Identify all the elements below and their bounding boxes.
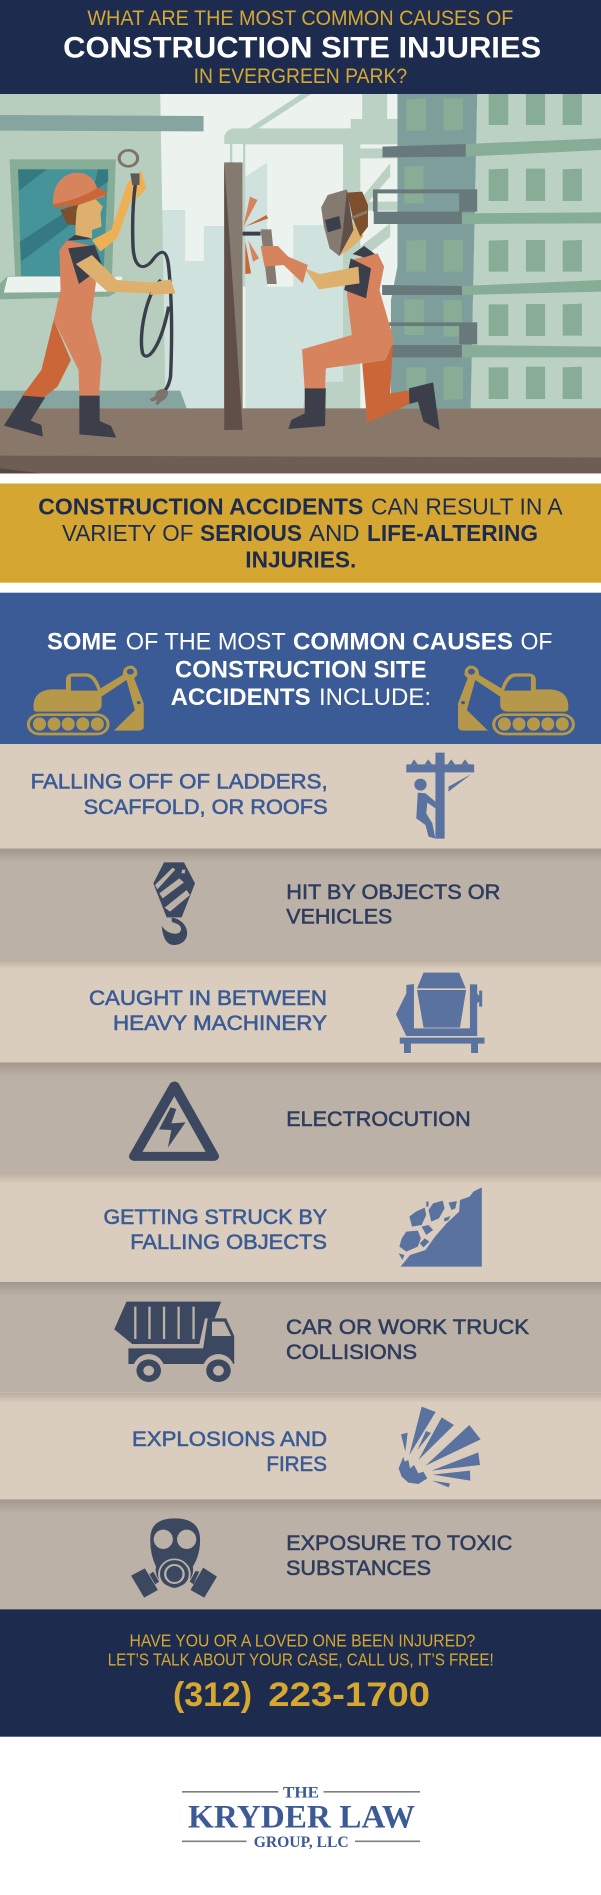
statement line 3: INJURIES. [245,547,356,573]
background skyline [161,94,399,408]
row 8: toxic substances [0,1499,601,1609]
worker left with cable [4,150,176,438]
statement line 1: CONSTRUCTION ACCIDENTS [38,494,363,520]
call to action text: HAVE YOU OR A LOVED ONE BEEN INJURED? [130,1630,476,1650]
phone number [173,1676,430,1714]
call to action text [108,1630,494,1669]
icon: crane hook [153,862,195,945]
building: left with window [0,94,204,408]
row 2 text [286,880,500,929]
panel: blue causes heading [0,593,601,744]
row 7: explosions [0,1393,601,1499]
icon: high voltage triangle [134,1086,214,1156]
row 4: electrocution [0,1062,601,1172]
icon: explosion [399,1407,481,1487]
row 6 text [286,1315,530,1364]
panel: call to action [0,1609,601,1737]
post [224,162,243,430]
panel: gold statement [0,484,601,583]
worker right welding [243,189,440,430]
title line 3: IN EVERGREEN PARK? [194,65,407,88]
icon: dump truck [114,1302,235,1387]
row 5 text: GETTING STRUCK BY [104,1205,327,1229]
row 8 text [286,1531,512,1580]
title line 2: CONSTRUCTION SITE INJURIES [63,31,541,64]
icon: cement mixer [396,973,484,1053]
icon: excavator left [28,666,144,734]
illustration: two construction workers [0,94,601,473]
row 7 text: FIRES [266,1452,327,1476]
logo: The Kryder Law Group: THE [283,1782,319,1801]
header: title band [0,0,601,94]
phone number: 223-1700 [268,1676,430,1714]
heading line 2: CONSTRUCTION SITE [175,656,426,683]
statement line 2: SERIOUS [200,520,302,546]
statement line 1 [38,494,563,520]
row 8 text: SUBSTANCES [286,1556,431,1580]
row 5 text [104,1205,327,1254]
heading line 1: COMMON CAUSES [293,629,513,656]
title line 1: WHAT ARE THE MOST COMMON CAUSES OF [87,7,513,30]
logo: The Kryder Law Group: GROUP, LLC [254,1834,349,1851]
row 3 text [89,986,327,1035]
call to action text: LET’S TALK ABOUT YOUR CASE, CALL US, IT’S FREE! [108,1649,494,1669]
row 1: falling [0,744,601,848]
row 1 text [31,769,328,819]
building: right tower [373,94,601,408]
statement line 2: AND [309,520,360,546]
logo: The Kryder Law Group [182,1782,420,1851]
ground [0,408,601,473]
heading line 1 [47,629,552,656]
heading line 3: INCLUDE: [319,684,431,711]
row 6: truck collisions [0,1282,601,1393]
row 2: hit by objects [0,848,601,960]
icon: worker climbing pole [406,753,474,839]
statement line 2: VARIETY OF [62,520,194,546]
statement line 2: LIFE-ALTERING [367,520,538,546]
heading line 1: OF THE MOST [126,629,286,656]
heading line 1: SOME [47,629,117,656]
heading line 1: OF [520,629,552,656]
heading line 3 [171,684,431,711]
row 2 text: HIT BY OBJECTS OR [286,880,500,904]
heading line 3: ACCIDENTS [171,684,311,711]
row 5: struck by falling objects [0,1172,601,1282]
icon: rockslide [399,1187,482,1267]
row 7 text [132,1427,327,1476]
logo: The Kryder Law Group: KRYDER LAW [188,1800,415,1836]
phone number: (312) [173,1676,252,1714]
row 4 text: ELECTROCUTION [286,1107,471,1131]
row 7 text: EXPLOSIONS AND [132,1427,327,1451]
row 3 text: CAUGHT IN BETWEEN [89,986,327,1010]
row 1 text: SCAFFOLD, OR ROOFS [84,795,328,819]
row 1 text: FALLING OFF OF LADDERS, [31,769,328,793]
icon: gas mask [131,1518,217,1598]
row 2 text: VEHICLES [286,905,392,929]
icon: excavator right [458,666,573,734]
row 8 text: EXPOSURE TO TOXIC [286,1531,512,1555]
row 6 text: COLLISIONS [286,1340,417,1364]
row 5 text: FALLING OBJECTS [130,1230,327,1254]
statement line 1: CAN RESULT IN A [371,494,563,520]
row 3: caught in machinery [0,960,601,1062]
row 3 text: HEAVY MACHINERY [113,1011,327,1035]
statement line 2 [62,520,538,546]
row 6 text: CAR OR WORK TRUCK [286,1315,530,1339]
